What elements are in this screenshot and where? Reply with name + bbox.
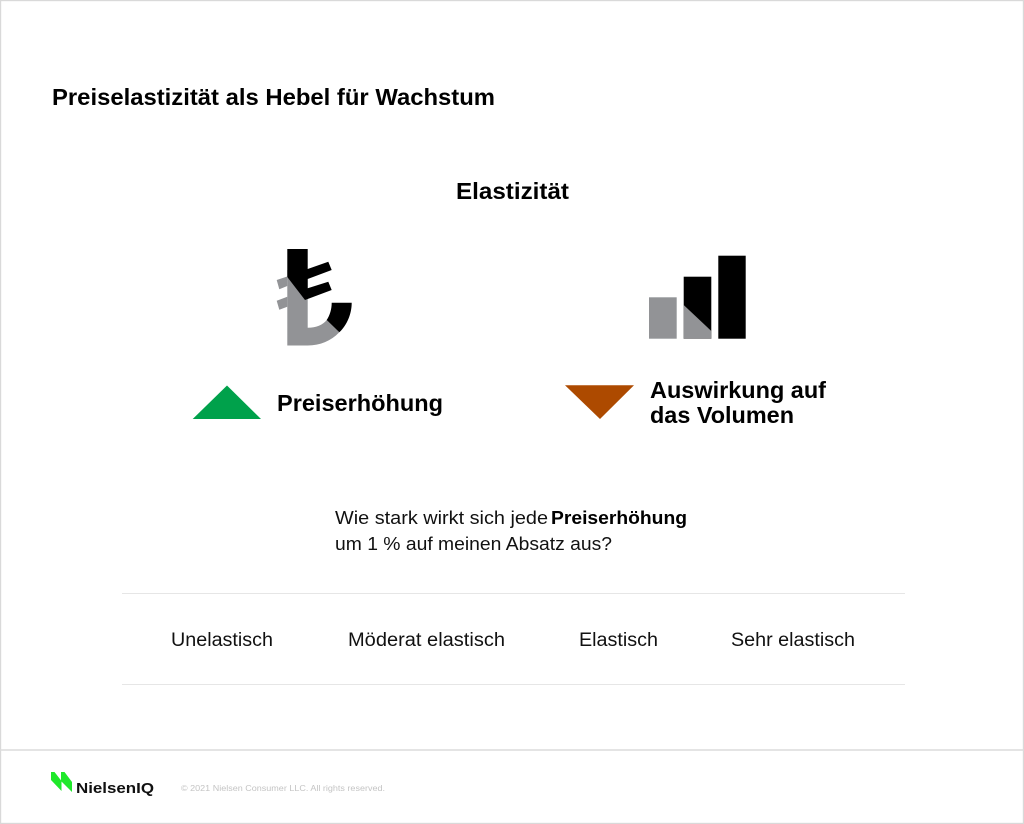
question text (335, 508, 687, 554)
question text: um 1 % auf meinen Absatz aus? (335, 534, 612, 554)
icon: green up triangle (193, 386, 261, 419)
elasticity scale labels (171, 630, 855, 651)
elasticity scale labels: Elastisch (579, 630, 658, 651)
label: Auswirkung auf das Volumen: das Volumen (650, 402, 794, 428)
icon: brown down triangle (565, 385, 634, 419)
logo: NielsenIQ (51, 772, 154, 797)
logo: NielsenIQ: NielsenIQ (76, 780, 154, 797)
title: Preiselastizität als Hebel für Wachstum (52, 84, 495, 110)
heading: Elastizität: Elastizität (456, 178, 569, 204)
icon: bar chart (649, 256, 746, 339)
copyright: © 2021 Nielsen Consumer LLC. All rights reserved. (181, 783, 385, 793)
label: Preiserhöhung: Preiserhöhung (277, 390, 443, 416)
label: Auswirkung auf das Volumen (650, 377, 826, 428)
elasticity scale labels: Sehr elastisch (731, 630, 855, 651)
question text: Preiserhöhung (551, 508, 687, 528)
elasticity scale labels: Möderat elastisch (348, 630, 505, 651)
question text: Wie stark wirkt sich jede (335, 508, 548, 528)
label: Auswirkung auf das Volumen: Auswirkung auf (650, 377, 826, 403)
elasticity scale labels: Unelastisch (171, 630, 273, 651)
icon: lira currency sign (277, 249, 352, 346)
